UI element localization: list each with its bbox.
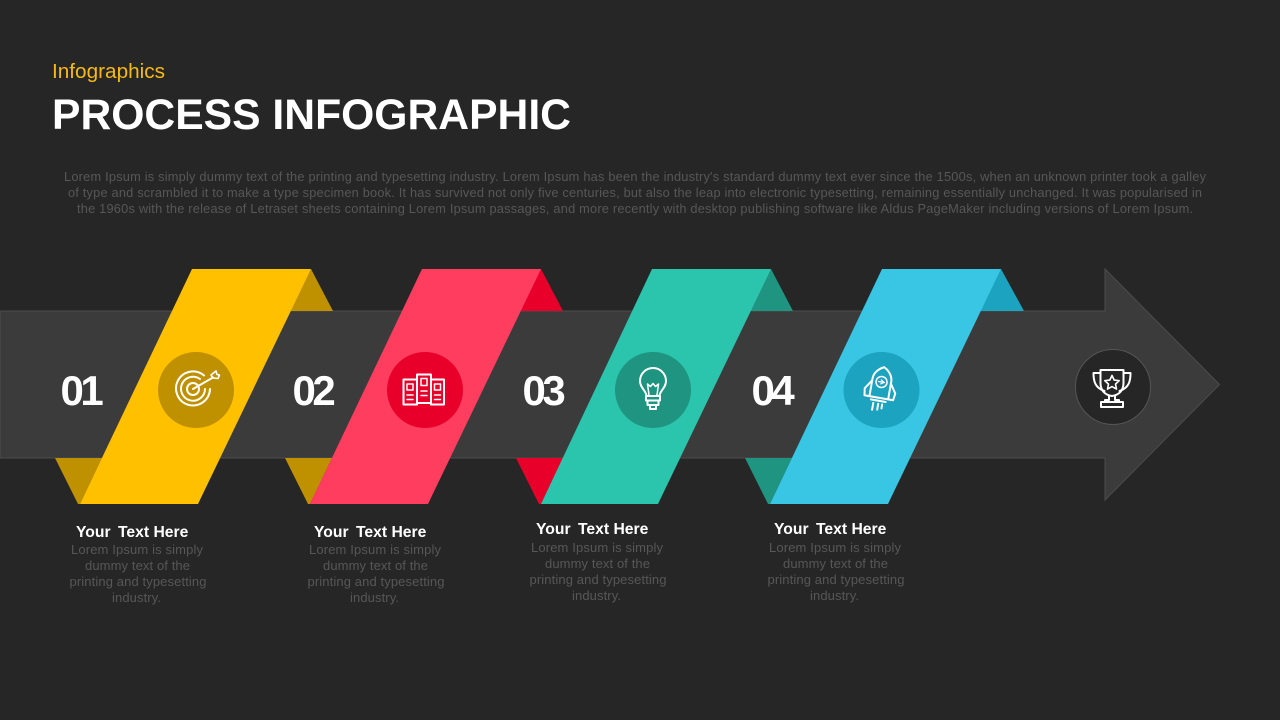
step 1 label: printing and typesetting (70, 574, 206, 589)
step 3 label: Text Here (578, 521, 649, 538)
icon: rocket (861, 365, 899, 413)
step 1 label (70, 524, 206, 605)
step 3 label: printing and typesetting (530, 572, 666, 587)
icon: trophy in circle (1076, 350, 1150, 424)
step 4 label: industry. (810, 588, 859, 603)
step 3 label: Your (536, 521, 571, 538)
step 2 label: Your (314, 524, 349, 541)
icon: target (176, 371, 220, 405)
intro text block (64, 169, 1207, 216)
step 1 label: Lorem Ipsum is simply (71, 542, 204, 557)
intro text block: of type and scrambled it to make a type specimen book. It has survived not only five centuries, but also the leap into electronic typesetting, remaining essentially unchanged. It was popularised in (68, 185, 1202, 200)
step 3 label: Lorem Ipsum is simply (531, 540, 664, 555)
step 2 label: dummy text of the (323, 558, 428, 573)
step 4 ribbon (745, 269, 1024, 504)
step 3 label: dummy text of the (545, 556, 650, 571)
step 1 label: industry. (112, 590, 161, 605)
number 01: 01 (60, 367, 103, 414)
step 4 label (768, 521, 904, 603)
icon: buildings (404, 374, 444, 404)
number 04: 04 (752, 367, 795, 414)
step 4 label: dummy text of the (783, 556, 888, 571)
step 1 label: dummy text of the (85, 558, 190, 573)
step 1 label: Text Here (118, 524, 189, 541)
step 1 label: Your (76, 524, 111, 541)
intro text block: Lorem Ipsum is simply dummy text of the printing and typesetting industry. Lorem Ipsum has been the industry's standard dummy text ever since the 1500s, when an unknown printer took a galley (64, 169, 1207, 184)
title: PROCESS INFOGRAPHIC (52, 91, 571, 139)
step 3 label (530, 521, 666, 603)
step 1 ribbon (55, 269, 333, 504)
step 2 ribbon (285, 269, 563, 504)
step 4 label: Your (774, 521, 809, 538)
step 2 label: Text Here (356, 524, 427, 541)
step 4 label: Text Here (816, 521, 887, 538)
step 3 label: industry. (572, 588, 621, 603)
step 2 label: printing and typesetting (308, 574, 444, 589)
step 2 label (308, 524, 444, 605)
number 03: 03 (522, 367, 564, 414)
number 02: 02 (292, 367, 334, 414)
step 2 label: Lorem Ipsum is simply (309, 542, 442, 557)
step 4 label: Lorem Ipsum is simply (769, 540, 902, 555)
intro text block: the 1960s with the release of Letraset sheets containing Lorem Ipsum passages, and more recently with desktop publishing software like Aldus PageMaker including versions of Lorem Ipsum. (77, 201, 1193, 216)
main arrow (0, 269, 1220, 500)
icon: light bulb (640, 368, 666, 409)
step 2 label: industry. (350, 590, 399, 605)
step 3 ribbon (516, 269, 793, 504)
step 4 label: printing and typesetting (768, 572, 904, 587)
subtitle: Infographics (52, 61, 165, 83)
